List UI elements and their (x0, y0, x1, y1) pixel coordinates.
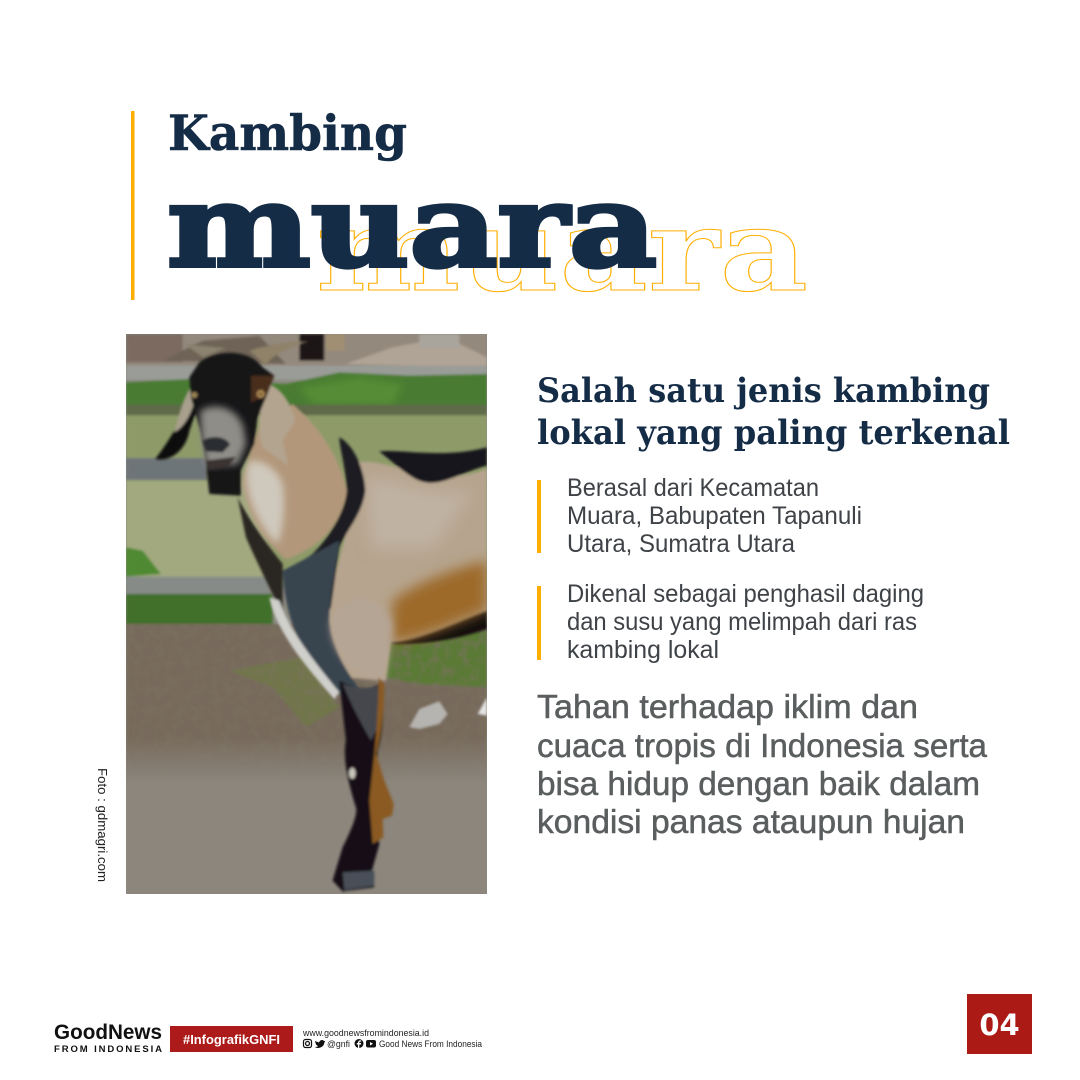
footer contact and social: www.goodnewsfromindonesia.id (302, 1028, 429, 1039)
ground texture (132, 624, 486, 720)
goat body (328, 462, 487, 681)
goat head (189, 353, 274, 496)
climate resilience paragraph: cuaca tropis di Indonesia serta (537, 727, 988, 764)
goat belly shadow (391, 609, 487, 644)
footer contact and social (302, 1028, 483, 1050)
ground (126, 622, 487, 773)
title outline echo: muara: muara (316, 183, 808, 317)
meat and milk text: kambing lokal (567, 636, 719, 664)
meat and milk text: Dikenal sebagai penghasil daging (567, 580, 924, 608)
dorsal stripe (379, 447, 487, 483)
fact block: meat and milk (537, 580, 924, 664)
title accent bar (131, 111, 134, 300)
footer logo: GoodNews From Indonesia (54, 1021, 162, 1055)
chest blue-grey fur (283, 541, 366, 697)
chest tan fur (331, 599, 393, 681)
leg (333, 681, 383, 891)
origin text: Utara, Sumatra Utara (567, 530, 795, 558)
photo credit: Foto : gdmagri.com (95, 768, 109, 882)
climate resilience paragraph (537, 688, 988, 840)
fence rails (126, 458, 208, 480)
origin text: Berasal dari Kecamatan (567, 474, 819, 502)
icon: twitter (315, 1040, 325, 1048)
neck tan (243, 404, 347, 559)
title block: Kambing muara (131, 104, 808, 317)
throat dark and white fringe (238, 497, 283, 614)
fact block: origin (537, 474, 862, 558)
climate resilience paragraph: Tahan terhadap iklim dan (537, 688, 918, 725)
icon: facebook (354, 1039, 364, 1048)
meat and milk accent bar (537, 586, 541, 660)
water (126, 412, 487, 586)
footer logo: GoodNews From Indonesia: FROM INDONESIA (54, 1044, 162, 1055)
origin text: Muara, Babupaten Tapanuli (567, 502, 862, 530)
page number badge (967, 994, 1032, 1054)
title word: muara: muara (167, 159, 657, 293)
hashtag badge (170, 1026, 293, 1052)
footer contact and social: Good News From Indonesia (379, 1039, 483, 1050)
origin accent bar (537, 480, 541, 553)
grass bank (126, 372, 487, 409)
climate resilience paragraph: kondisi panas ataupun hujan (537, 803, 965, 840)
photo: muara goat (126, 334, 487, 896)
icon: instagram (304, 1040, 312, 1048)
page number badge: 04 (979, 1008, 1020, 1042)
neck dark stripe (308, 436, 367, 610)
footer contact and social: @gnfi (327, 1039, 350, 1050)
hashtag badge: #InfografikGNFI (183, 1032, 280, 1047)
heading: local goat: Salah satu jenis kambing (537, 371, 990, 411)
icon: youtube (366, 1040, 376, 1048)
heading: local goat (537, 371, 1010, 453)
rock (409, 701, 448, 729)
heading: local goat: lokal yang paling terkenal (537, 413, 1010, 453)
footer logo: GoodNews From Indonesia: GoodNews (54, 1021, 162, 1044)
origin text (567, 474, 862, 558)
meat and milk text (567, 580, 924, 664)
ears (154, 406, 197, 462)
climate resilience paragraph: bisa hidup dengan baik dalam (537, 765, 980, 802)
background rubble (184, 334, 485, 364)
title word: Kambing: Kambing (168, 104, 407, 162)
meat and milk text: dan susu yang melimpah dari ras (567, 608, 917, 636)
railing (126, 366, 487, 380)
lower grass (126, 547, 161, 577)
horns (249, 341, 309, 366)
